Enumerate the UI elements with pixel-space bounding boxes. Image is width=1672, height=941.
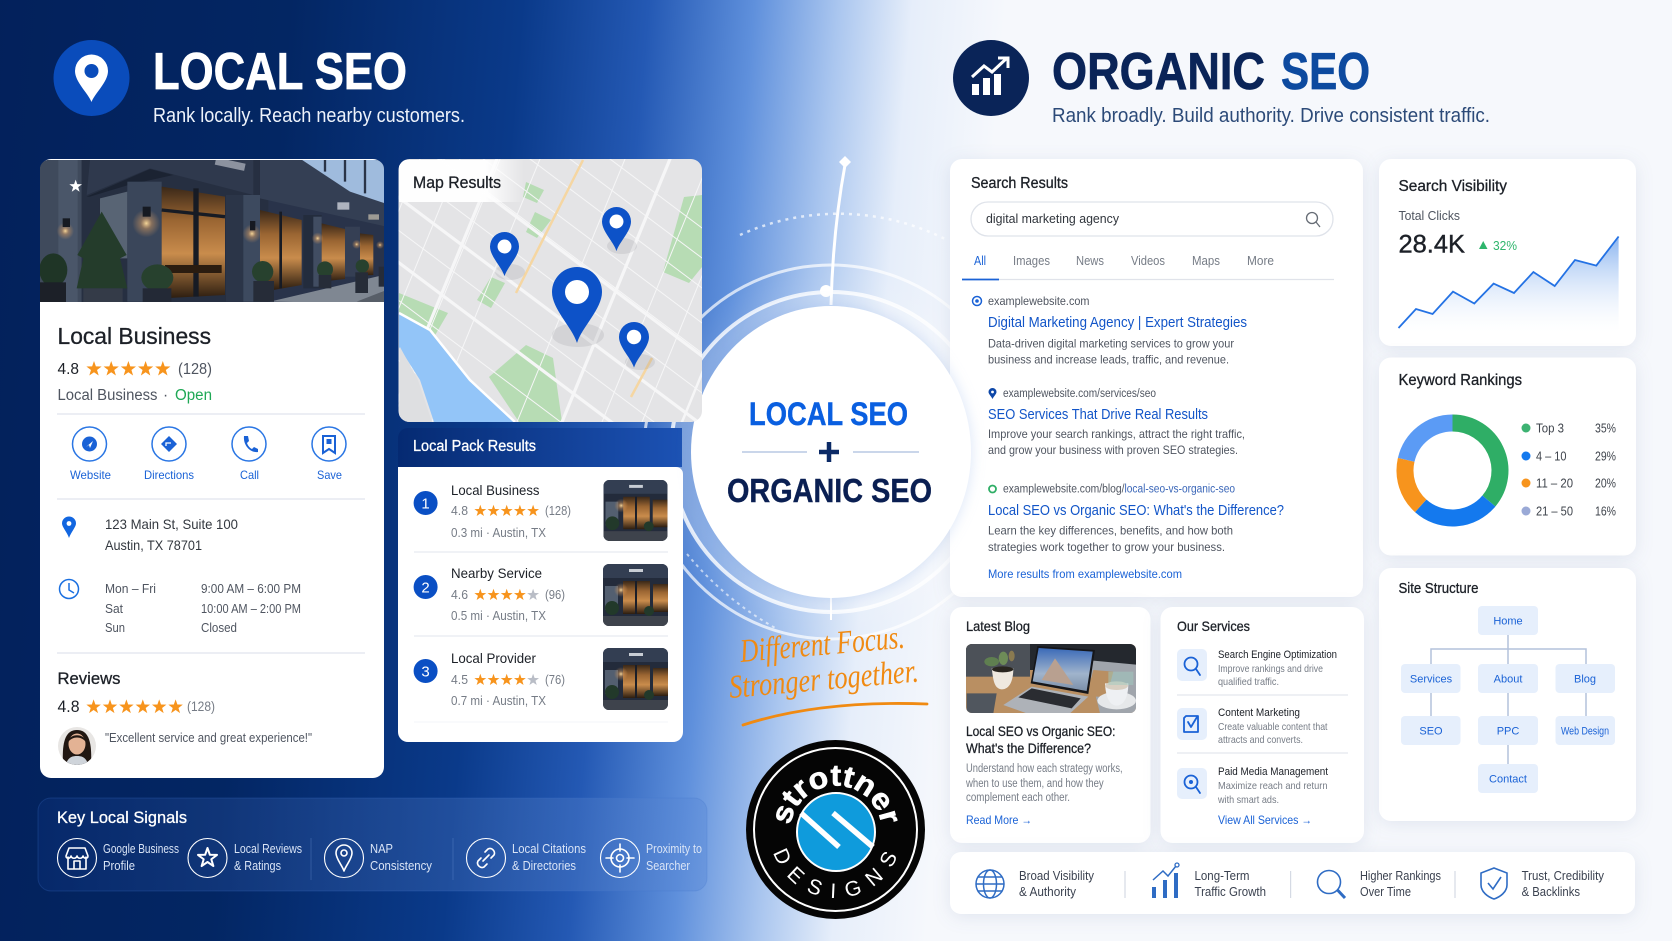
reviews: 4.8 (58, 698, 80, 716)
pack item 3: 4.5 (451, 673, 468, 687)
benefit: broad visibility (976, 869, 1095, 899)
panel: search visibility (1379, 159, 1636, 346)
service: paid media: Paid Media Management (1218, 766, 1328, 778)
legend: 35% (1595, 422, 1616, 436)
subtitle: organic seo: Rank broadly. Build authority. Drive consistent traffic. (1052, 104, 1490, 127)
logo: strottner designs (746, 740, 925, 919)
site tree nodes: SEO (1419, 726, 1443, 738)
service: content: Create valuable content that (1218, 721, 1328, 733)
signal: nap consistency: NAP (370, 842, 393, 856)
result 1: business and increase leads, traffic, and revenue. (988, 352, 1229, 366)
result 1: Data-driven digital marketing services to grow your (988, 336, 1234, 350)
view all link: View All Services → (1218, 813, 1312, 827)
map river (399, 313, 515, 422)
panel: site structure (1379, 568, 1636, 821)
result 1: Digital Marketing Agency | Expert Strategies (988, 314, 1247, 331)
site tree nodes: Contact (1489, 774, 1527, 786)
map label: Map Results (413, 174, 501, 192)
site tree nodes (1401, 606, 1615, 793)
signal: nap consistency (324, 838, 433, 878)
blog photo: laptop on desk (966, 644, 1136, 713)
result 2: examplewebsite.com/services/seo (1003, 388, 1156, 400)
service: content: attracts and converts. (1218, 734, 1303, 746)
benefit: long-term growth: Long-Term (1194, 869, 1250, 883)
pack item 3 (414, 648, 668, 710)
signal: google business profile: Profile (103, 859, 135, 873)
pack item 2: (96) (545, 588, 565, 602)
center rings (643, 156, 1019, 640)
result 2: Improve your search rankings, attract the right traffic, (988, 427, 1245, 441)
panel: local pack results (398, 428, 683, 742)
pack item 1: 0.3 mi · Austin, TX (451, 526, 547, 540)
icon: map pin 3 (619, 322, 649, 368)
legend: 16% (1595, 504, 1616, 518)
read more link: Read More → (966, 813, 1032, 827)
reviews: (128) (187, 698, 215, 714)
address: Austin, TX 78701 (105, 537, 202, 553)
pack item 3: 3 (421, 664, 430, 680)
search tabs: Images (1013, 254, 1050, 268)
action: save (312, 427, 346, 482)
pack item 3: (76) (545, 673, 565, 687)
signal: local reviews (188, 838, 302, 878)
trend (1479, 238, 1517, 253)
pack item 3: 0.7 mi · Austin, TX (451, 694, 547, 708)
logo: strottner designs: DESIGNS (774, 848, 896, 898)
opening hours: Mon – Fri (105, 582, 156, 596)
icon: main map pin (552, 267, 602, 343)
title: organic seo: SEO (1281, 43, 1370, 101)
panel: our services: Our Services (1177, 618, 1250, 634)
action: website: Website (70, 468, 111, 482)
storefront photo (39, 155, 390, 305)
pack item 1: (128) (545, 504, 571, 518)
category and status: · (163, 387, 168, 404)
legend: 21 – 50 (1536, 504, 1573, 518)
site tree nodes: Blog (1574, 674, 1596, 686)
pack item 3: Local Provider (451, 650, 536, 666)
result 2: SEO Services That Drive Real Results (988, 406, 1208, 423)
benefit: long-term growth (1153, 863, 1266, 899)
signal: proximity: Searcher (646, 859, 690, 873)
action: call: Call (240, 468, 259, 482)
benefit: broad visibility: Broad Visibility (1019, 869, 1095, 883)
signal: google business profile: Google Business (103, 842, 179, 856)
legend: 11 – 20 (1536, 476, 1573, 490)
panel: search visibility: Total Clicks (1398, 209, 1460, 223)
title: organic seo: ORGANIC (1052, 43, 1265, 101)
line chart (1398, 236, 1619, 332)
result 2: and grow your business with proven SEO strategies. (988, 443, 1238, 457)
icon: map pin 2 (602, 207, 631, 251)
signal: local reviews: Local Reviews (234, 842, 302, 856)
review quote: "Excellent service and great experience!" (105, 731, 312, 745)
site tree nodes: PPC (1497, 726, 1519, 738)
benefit: higher rankings: Higher Rankings (1360, 869, 1441, 883)
panel: site structure: Site Structure (1398, 581, 1478, 597)
icon: reviewer avatar (58, 727, 96, 768)
search tabs: Videos (1131, 254, 1165, 268)
site tree nodes: About (1494, 674, 1522, 686)
search box: digital marketing agency (986, 211, 1119, 226)
benefit: higher rankings: Over Time (1360, 885, 1411, 899)
icon: location pin (54, 40, 130, 116)
blog excerpt: when to use them, and how they (965, 778, 1104, 790)
pack item 2: 4.6 (451, 588, 468, 602)
panel: our services (1160, 607, 1364, 843)
plus sign (742, 442, 919, 462)
opening hours: Sat (105, 602, 124, 616)
signal: local citations: Local Citations (512, 842, 586, 856)
pack item 1: 1 (421, 496, 430, 512)
donut chart (1405, 423, 1500, 518)
category and status: Local Business (58, 387, 158, 404)
search tabs (962, 254, 1334, 280)
panel: latest blog (950, 607, 1150, 843)
benefit: trust: & Backlinks (1522, 885, 1580, 899)
opening hours: 10:00 AM – 2:00 PM (201, 602, 301, 616)
service: content: Content Marketing (1218, 707, 1300, 719)
signal: local citations (466, 838, 586, 878)
result 3: Learn the key differences, benefits, and how both (988, 524, 1233, 538)
benefit: long-term growth: Traffic Growth (1194, 885, 1266, 899)
rating row: (128) (178, 361, 212, 378)
blog excerpt: Understand how each strategy works, (966, 763, 1123, 775)
benefit: higher rankings (1318, 869, 1441, 899)
blog excerpt: complement each other. (966, 792, 1070, 804)
legend: 20% (1595, 476, 1616, 490)
panel: search results: Search Results (971, 175, 1068, 192)
result 3 (988, 484, 1284, 554)
reviews (58, 669, 215, 716)
result 3: local-seo-vs-organic-seo (1124, 484, 1235, 496)
service: seo (1177, 649, 1337, 688)
search box (971, 202, 1333, 236)
panel: keyword rankings: Keyword Rankings (1398, 372, 1522, 389)
tagline: Stronger together. (728, 654, 920, 706)
rating row: 4.8 (58, 361, 79, 378)
signal: local citations: & Directories (512, 859, 576, 873)
search tabs: More (1247, 254, 1274, 268)
panel: search visibility: Search Visibility (1398, 178, 1507, 195)
search tabs: News (1076, 254, 1104, 268)
service: paid media (1177, 766, 1328, 806)
blog excerpt (965, 763, 1123, 804)
panel: local pack results: Local Pack Results (413, 438, 536, 455)
legend (1522, 422, 1616, 518)
result 3: examplewebsite.com/blog/ (1003, 484, 1125, 496)
service: content (1177, 707, 1328, 746)
signal: local reviews: & Ratings (234, 859, 281, 873)
action: save: Save (317, 468, 342, 482)
tagline (728, 620, 927, 725)
pack item 2: 0.5 mi · Austin, TX (451, 609, 547, 623)
tagline: Different Focus. (738, 620, 906, 670)
site tree nodes: Web Design (1561, 726, 1609, 738)
left header (54, 40, 465, 127)
pack item 2: Nearby Service (451, 565, 542, 581)
result 2 (988, 388, 1245, 457)
title: local seo: LOCAL SEO (153, 43, 407, 101)
blog headline: What's the Difference? (966, 740, 1091, 756)
center badge (691, 306, 971, 598)
logo: strottner designs: strottner (776, 766, 898, 824)
legend: Top 3 (1536, 422, 1564, 436)
opening hours: 9:00 AM – 6:00 PM (201, 582, 301, 596)
site tree nodes: Home (1493, 616, 1523, 628)
panel: keyword rankings (1379, 358, 1636, 556)
panel: google business card (39, 155, 390, 778)
map orange roads (516, 160, 652, 397)
legend: 29% (1595, 450, 1616, 464)
signal: proximity (600, 838, 702, 878)
panel: search visibility: 28.4K (1398, 231, 1465, 259)
site tree nodes: Services (1410, 674, 1453, 686)
benefit: trust: Trust, Credibility (1522, 869, 1605, 883)
badge title: local seo: LOCAL SEO (749, 396, 908, 432)
panel: map results (398, 159, 702, 422)
legend: 4 – 10 (1536, 450, 1567, 464)
badge title: organic seo: ORGANIC SEO (727, 472, 932, 509)
panel: key local signals (38, 798, 707, 891)
trend: 32% (1493, 238, 1517, 253)
more results link: More results from examplewebsite.com (988, 567, 1182, 581)
pack item 1: 4.8 (451, 504, 468, 518)
opening hours: Sun (105, 621, 125, 635)
map label (399, 160, 524, 202)
result 3: Local SEO vs Organic SEO: What's the Difference? (988, 502, 1284, 519)
panel: latest blog: Latest Blog (966, 618, 1030, 634)
icon: map pin 1 (490, 232, 519, 276)
blog headline (966, 723, 1116, 756)
signal: nap consistency: Consistency (370, 859, 433, 873)
subtitle: local seo: Rank locally. Reach nearby customers. (153, 105, 465, 127)
opening hours (60, 580, 301, 635)
signal: proximity: Proximity to (646, 842, 702, 856)
blog headline: Local SEO vs Organic SEO: (966, 723, 1116, 739)
service: seo: Improve rankings and drive (1218, 663, 1323, 675)
service: paid media: Maximize reach and return (1218, 780, 1328, 792)
reviews: Reviews (58, 669, 120, 688)
benefit: trust (1481, 868, 1605, 899)
pack item 1: Local Business (451, 482, 540, 498)
service: paid media: with smart ads. (1217, 794, 1279, 806)
business name: Local Business (58, 323, 211, 349)
panel: search results (950, 159, 1363, 597)
result 3: strategies work together to grow your business. (988, 540, 1225, 554)
pack item 2: 2 (421, 580, 430, 596)
map pin shadows (495, 238, 655, 370)
address: 123 Main St, Suite 100 (105, 516, 238, 532)
service: seo: Search Engine Optimization (1218, 649, 1337, 661)
result 1: examplewebsite.com (988, 294, 1090, 308)
pack item 2 (414, 564, 668, 626)
icon: growth chart (953, 40, 1029, 116)
panel: organic benefits strip (950, 852, 1635, 914)
benefit: broad visibility: & Authority (1019, 885, 1077, 899)
category and status (58, 387, 212, 404)
address (62, 516, 238, 553)
action: call (232, 427, 266, 482)
search tabs: Maps (1192, 254, 1220, 268)
opening hours: Closed (201, 621, 237, 635)
action: website (70, 427, 111, 482)
action: directions: Directions (144, 468, 194, 482)
category and status: Open (175, 387, 212, 404)
search tabs: All (974, 254, 986, 268)
rating row (58, 361, 212, 378)
map roads (398, 159, 702, 422)
signal: google business profile (58, 838, 179, 878)
map parks (399, 182, 702, 422)
result 1 (972, 294, 1247, 366)
panel: key local signals: Key Local Signals (57, 808, 187, 827)
right header (953, 40, 1490, 127)
pack item 1 (414, 480, 667, 541)
action: directions (144, 427, 194, 482)
service: seo: qualified traffic. (1218, 676, 1279, 688)
